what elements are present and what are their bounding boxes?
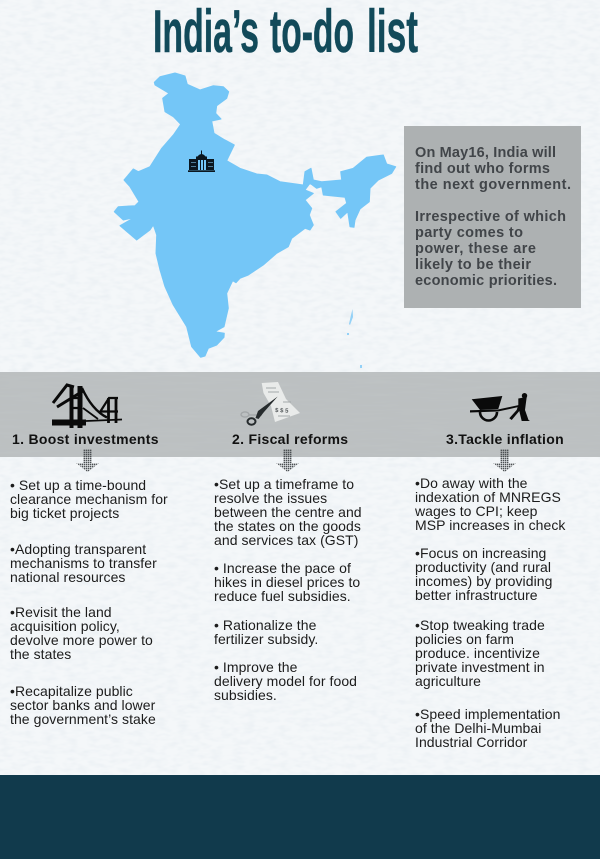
islands: [347, 309, 362, 368]
text block: fiscal actions: •Set up a timeframe to: [214, 476, 354, 492]
text block: investment actions: •Recapitalize public: [10, 683, 133, 699]
text block: fiscal actions: and services tax (GST): [214, 532, 358, 548]
text block: investment actions: the government’s stake: [10, 711, 156, 727]
callout: intro text box: Irrespective of which: [415, 209, 566, 225]
icon: parliament building: [188, 150, 215, 172]
text block: inflation actions: •Speed implementation: [415, 706, 560, 722]
text block: fiscal actions: reduce fuel subsidies.: [214, 588, 351, 604]
callout: intro text box: find out who forms: [415, 161, 550, 177]
heading: tackle inflation: 3.Tackle inflation: [446, 431, 564, 447]
text block: inflation actions: indexation of MNREGS: [415, 489, 561, 505]
text block: fiscal actions: subsidies.: [214, 687, 277, 703]
text block: fiscal actions: hikes in diesel prices to: [214, 574, 360, 590]
arrow: column 2: [276, 449, 299, 472]
text block: investment actions: •Revisit the land: [10, 604, 112, 620]
text block: inflation actions: of the Delhi-Mumbai: [415, 720, 541, 736]
text block: inflation actions: incomes) by providing: [415, 573, 552, 589]
callout: intro text box: the next government.: [415, 177, 571, 193]
mainland and north-east outline: [114, 73, 396, 357]
icon: scissors and paper: [240, 382, 300, 426]
callout: intro text box: On May16, India will: [415, 145, 556, 161]
text block: inflation actions: Industrial Corridor: [415, 734, 527, 750]
icon: bridge: [52, 383, 122, 428]
text block: inflation actions: agriculture: [415, 673, 481, 689]
text block: inflation actions: policies on farm: [415, 631, 514, 647]
text block: investment actions: acquisition policy,: [10, 618, 120, 634]
text block: inflation actions: wages to CPI; keep: [415, 503, 537, 519]
footer band: [0, 775, 600, 859]
icon: scissors and paper: $ $ 5: [275, 408, 289, 415]
text block: investment actions: the states: [10, 646, 71, 662]
text block: inflation actions: •Focus on increasing: [415, 545, 546, 561]
text block: investment actions: national resources: [10, 569, 125, 585]
text block: fiscal actions: [214, 476, 362, 703]
text block: inflation actions: better infrastructure: [415, 587, 538, 603]
icon: man pulling cart: [470, 393, 530, 422]
map of India: [114, 72, 396, 368]
callout: intro text box: party comes to: [415, 225, 523, 241]
heading: fiscal reforms: 2. Fiscal reforms: [232, 431, 348, 447]
text block: inflation actions: private investment in: [415, 659, 545, 675]
grey header band: [0, 372, 600, 457]
text block: investment actions: •Adopting transparent: [10, 541, 146, 557]
text block: investment actions: sector banks and lower: [10, 697, 155, 713]
text block: inflation actions: productivity (and rural: [415, 559, 551, 575]
callout: intro text box: [404, 126, 581, 308]
text block: fiscal actions: • Increase the pace of: [214, 560, 351, 576]
arrow: column 3: [493, 449, 516, 472]
callout: intro text box: economic priorities.: [415, 273, 557, 289]
text block: inflation actions: •Do away with the: [415, 475, 528, 491]
text block: investment actions: clearance mechanism for: [10, 491, 168, 507]
text block: inflation actions: [415, 475, 566, 750]
text block: fiscal actions: the states on the goods: [214, 518, 361, 534]
text block: fiscal actions: delivery model for food: [214, 673, 357, 689]
text block: fiscal actions: fertilizer subsidy.: [214, 631, 318, 647]
text block: fiscal actions: resolve the issues: [214, 490, 327, 506]
text block: investment actions: [10, 477, 168, 727]
text block: investment actions: • Set up a time-bound: [10, 477, 146, 493]
heading: boost investments: 1. Boost investments: [12, 431, 159, 447]
text block: investment actions: devolve more power to: [10, 632, 153, 648]
text block: investment actions: big ticket projects: [10, 505, 119, 521]
callout: intro text box: likely to be their: [415, 257, 531, 273]
text block: inflation actions: produce. incentivize: [415, 645, 540, 661]
text block: fiscal actions: between the centre and: [214, 504, 362, 520]
text block: fiscal actions: • Improve the: [214, 659, 298, 675]
text block: investment actions: mechanisms to transfer: [10, 555, 157, 571]
arrow: column 1: [76, 449, 99, 472]
text block: inflation actions: •Stop tweaking trade: [415, 617, 545, 633]
callout: intro text box: power, these are: [415, 241, 536, 257]
text block: inflation actions: MSP increases in check: [415, 517, 565, 533]
text block: fiscal actions: • Rationalize the: [214, 617, 316, 633]
